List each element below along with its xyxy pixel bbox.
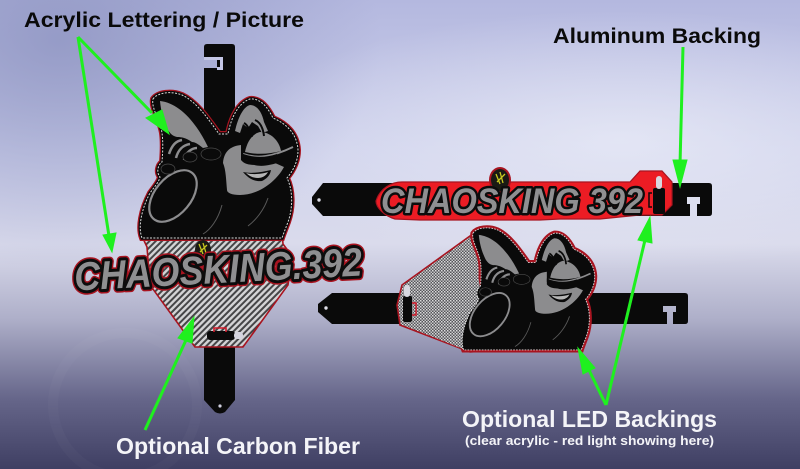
arrow: lettering to name: [78, 37, 116, 252]
arrow: LED backing upper: [606, 217, 652, 405]
heading: optional LED backings: Optional LED Backings: [462, 406, 717, 432]
strap hole: [218, 404, 222, 408]
lettering: CHAOSKING.392: CHAOSKING.392: [73, 240, 363, 300]
panel: horizontal badge with red LED backing: CHAOSKING 392: [381, 182, 643, 221]
panel: horizontal badge with red LED backing: [376, 167, 672, 221]
bee dashed edge: [140, 93, 298, 238]
caption: clear acrylic: (clear acrylic - red light showing here): [465, 433, 714, 448]
heading: acrylic lettering: Acrylic Lettering / Picture: [24, 8, 304, 32]
bee outline red: [140, 93, 298, 238]
panel: vertical badge: [73, 93, 363, 347]
lettering: CHAOSKING.392: CHAOSKING.392: [73, 240, 363, 300]
lettering: CHAOSKING 392: CHAOSKING 392: [381, 182, 643, 221]
lettering: CHAOSKING.392: CHAOSKING.392: [73, 240, 363, 300]
heading: optional carbon fiber: Optional Carbon Fiber: [116, 433, 360, 459]
bee picture: [462, 228, 595, 350]
spark plug: [207, 328, 243, 340]
lower horizontal aluminum strap: [318, 293, 688, 324]
bee outline stitched: [140, 93, 298, 238]
mini bee: [489, 167, 511, 193]
knit carbon backing: [397, 236, 500, 352]
arrow: aluminum backing: [673, 47, 687, 187]
red LED backing: [376, 171, 672, 220]
panel: lower badge: [397, 228, 595, 352]
heading: aluminum backing: Aluminum Backing: [553, 24, 761, 48]
bee picture: [140, 93, 298, 238]
bee outline red: [462, 228, 595, 350]
vertical aluminum strap: [204, 44, 235, 414]
arrow: LED backing lower: [578, 348, 606, 405]
carbon fiber backing: [140, 232, 292, 347]
upper horizontal aluminum strap: [312, 183, 712, 216]
patch carbon over bee outline: [398, 238, 482, 349]
strap slot: [204, 57, 223, 70]
arrow: carbon fiber: [145, 317, 194, 430]
arrow: lettering to picture: [78, 37, 169, 134]
spark plug: [649, 176, 665, 214]
spark plug: [403, 285, 416, 322]
mini bee: [195, 240, 211, 260]
